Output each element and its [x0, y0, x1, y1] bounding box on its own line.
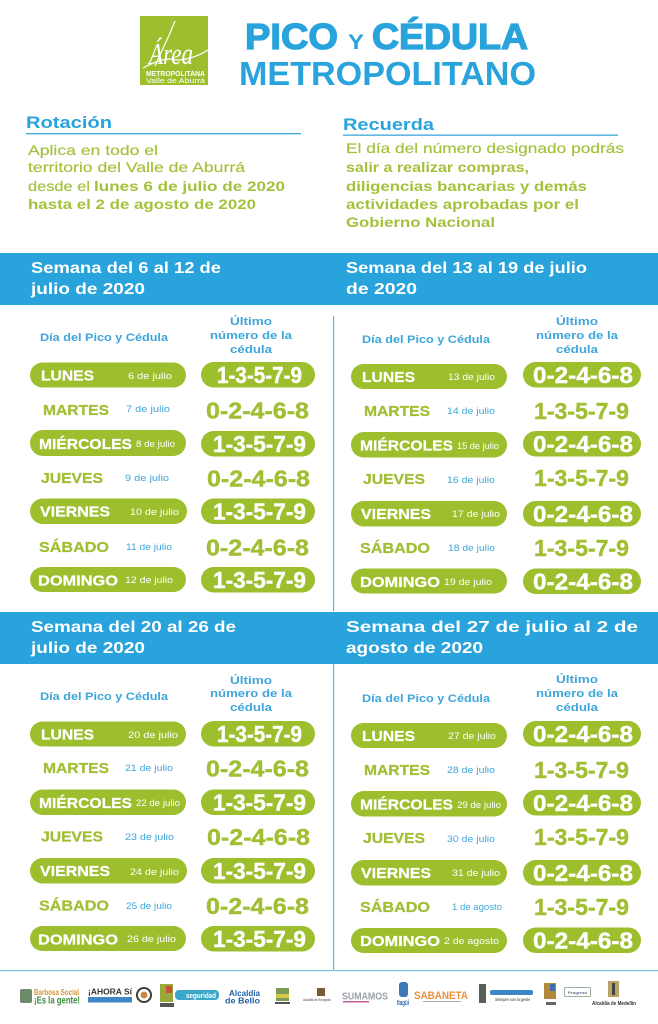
row: miércoles 8: MIÉRCOLES — [39, 436, 132, 453]
logo: Alcaldía de Medellín — [592, 981, 636, 1007]
panel: semana 6 al 12 de julio — [30, 315, 315, 593]
panel: rotación: Aplica en todo el — [28, 142, 158, 158]
row: sábado 11: 11 de julio — [126, 542, 172, 552]
row: viernes 31 — [351, 860, 641, 886]
row: jueves 16 — [363, 465, 629, 491]
row: sábado 18: SÁBADO — [360, 540, 430, 557]
panel: recuerda: actividades aprobadas por el — [346, 196, 579, 212]
row: miércoles 29 — [351, 790, 641, 816]
row: martes 21 — [43, 756, 309, 782]
row: martes 7: 7 de julio — [126, 404, 170, 414]
row: jueves 9: JUEVES — [41, 470, 103, 487]
row: sábado 1 agosto — [360, 894, 629, 920]
row: martes 21: 0-2-4-6-8 — [206, 756, 309, 782]
logo: Alcaldía de Medellín: Alcaldía de Medellín — [592, 1001, 636, 1007]
row: sábado 25: SÁBADO — [39, 898, 109, 914]
band: weeks 3 and 4: Semana del 27 de julio al 2 de — [346, 619, 638, 636]
logo: La Estrella — [479, 984, 533, 1003]
row: jueves 16: 16 de julio — [447, 475, 495, 485]
row: domingo 26: 1-3-5-7-9 — [213, 926, 306, 952]
row: viernes 31: 0-2-4-6-8 — [533, 860, 633, 886]
panel: rotación: lunes 6 de julio de 2020 — [94, 178, 285, 194]
panel: recuerda: salir a realizar compras, — [346, 159, 529, 175]
logo: Envigado: Alcaldía de Envigado — [303, 998, 331, 1002]
row: sábado 25: 25 de julio — [126, 901, 172, 911]
row: martes 14: 14 de julio — [447, 406, 495, 416]
row: jueves 16: 1-3-5-7-9 — [534, 465, 629, 491]
row: lunes 20 — [30, 721, 315, 747]
panel: semana 20 al 26 de julio: número de la — [210, 688, 293, 700]
panel: semana 27 de julio al 2 de agosto: Último — [556, 673, 598, 686]
row: miércoles 15: 15 de julio — [457, 441, 499, 451]
band: weeks 3 and 4: julio de 2020 — [30, 640, 145, 657]
row: lunes 13: 0-2-4-6-8 — [533, 362, 633, 388]
row: miércoles 8: 8 de julio — [136, 439, 175, 449]
row: sábado 11 — [39, 534, 309, 560]
row: lunes 6: 6 de julio — [128, 371, 172, 381]
panel: semana 20 al 26 de julio: Día del Pico y Cédula — [40, 691, 169, 703]
row: martes 28: 28 de julio — [447, 765, 495, 775]
row: jueves 9 — [41, 466, 310, 492]
row: domingo 19: DOMINGO — [360, 574, 440, 591]
row: martes 14: 1-3-5-7-9 — [534, 398, 629, 424]
row: miércoles 22: 1-3-5-7-9 — [213, 790, 306, 816]
row: sábado 18: 1-3-5-7-9 — [534, 535, 629, 561]
panel: semana 13 al 19 de julio — [351, 315, 641, 594]
row: domingo 2 agosto: 2 de agosto — [444, 936, 499, 946]
panel: recuerda — [343, 116, 624, 230]
panel: rotación: hasta el 2 de agosto de 2020 — [28, 196, 256, 212]
row: sábado 1 agosto: SÁBADO — [360, 899, 430, 916]
panel: rotación: desde el — [28, 178, 90, 194]
row: viernes 24: 1-3-5-7-9 — [213, 858, 306, 884]
row: domingo 2 agosto: DOMINGO — [360, 933, 440, 950]
row: domingo 2 agosto: 0-2-4-6-8 — [533, 928, 633, 954]
row: viernes 10: 10 de julio — [130, 507, 179, 517]
panel: semana 27 de julio al 2 de agosto: Día del Pico y Cédula — [362, 693, 491, 705]
row: domingo 12 — [30, 567, 315, 593]
panel: rotación — [26, 114, 301, 212]
logo: Área Metropolitana: Área — [148, 36, 193, 71]
logo: Área Metropolitana: Valle de Aburrá — [146, 78, 205, 85]
row: viernes 17: 0-2-4-6-8 — [533, 501, 633, 527]
row: miércoles 8: 1-3-5-7-9 — [213, 431, 306, 457]
row: jueves 30: JUEVES — [363, 830, 425, 847]
panel: semana 6 al 12 de julio: cédula — [230, 344, 273, 356]
band: weeks 3 and 4: agosto de 2020 — [346, 640, 483, 657]
row: miércoles 29: MIÉRCOLES — [360, 796, 453, 814]
row: jueves 9: 9 de julio — [125, 473, 169, 483]
logo: seguridad — [175, 990, 219, 1000]
logo: Caldas: Progreso — [568, 990, 588, 995]
panel: recuerda: Recuerda — [343, 116, 435, 134]
row: viernes 31: 31 de julio — [452, 868, 500, 878]
panel: semana 6 al 12 de julio: Último — [230, 315, 272, 328]
logo: Ahora Sí: ¡AHORA Sí — [88, 988, 133, 996]
band: weeks 1 and 2: julio de 2020 — [30, 281, 145, 298]
row: viernes 24: VIERNES — [40, 863, 110, 880]
title: METROPOLITANO — [239, 55, 536, 92]
logo: Alcaldía de Bello — [225, 989, 261, 1006]
icon: seal — [137, 988, 151, 1002]
panel: semana 27 de julio al 2 de agosto — [351, 673, 641, 954]
logo: Área Metropolitana — [140, 16, 208, 85]
row: sábado 25: 0-2-4-6-8 — [206, 893, 309, 919]
row: martes 14 — [364, 398, 629, 424]
row: domingo 19: 19 de julio — [444, 577, 492, 587]
row: lunes 13: LUNES — [362, 369, 415, 386]
row: domingo 26 — [30, 926, 315, 952]
row: miércoles 15 — [351, 431, 641, 458]
panel: semana 27 de julio al 2 de agosto: cédula — [556, 702, 599, 714]
panel: semana 13 al 19 de julio: número de la — [536, 330, 619, 342]
row: viernes 24: 24 de julio — [130, 867, 179, 877]
row: miércoles 22 — [30, 790, 315, 816]
row: jueves 30: 30 de julio — [447, 834, 495, 844]
band: weeks 1 and 2: de 2020 — [346, 281, 417, 298]
panel: semana 13 al 19 de julio: Día del Pico y Cédula — [362, 334, 491, 346]
title: Y — [348, 31, 364, 54]
panel: rotación: Rotación — [26, 114, 112, 132]
panel: semana 13 al 19 de julio: Último — [556, 315, 598, 328]
row: lunes 6 — [30, 362, 315, 388]
row: jueves 30: 1-3-5-7-9 — [534, 824, 629, 850]
icon: Bello shield — [275, 988, 290, 1004]
row: lunes 27: 0-2-4-6-8 — [533, 721, 633, 747]
panel: semana 20 al 26 de julio: cédula — [230, 702, 273, 714]
row: viernes 17: VIERNES — [361, 506, 431, 523]
row: lunes 27: 27 de julio — [448, 731, 496, 741]
panel: semana 20 al 26 de julio — [30, 674, 315, 952]
row: miércoles 29: 0-2-4-6-8 — [533, 790, 633, 816]
logo: La Estrella: Siempre con la gente — [495, 997, 530, 1002]
row: domingo 12: DOMINGO — [38, 572, 118, 590]
row: lunes 20: 1-3-5-7-9 — [217, 721, 302, 747]
row: miércoles 15: MIÉRCOLES — [360, 438, 453, 454]
row: domingo 12: 1-3-5-7-9 — [213, 567, 306, 593]
row: viernes 24 — [30, 858, 315, 884]
row: martes 14: MARTES — [364, 403, 430, 420]
row: martes 28: MARTES — [364, 762, 430, 779]
row: sábado 11: 0-2-4-6-8 — [206, 534, 309, 560]
row: miércoles 22: MIÉRCOLES — [39, 795, 132, 812]
row: viernes 17: 17 de julio — [452, 509, 500, 519]
row: jueves 16: JUEVES — [363, 471, 425, 488]
row: sábado 18: 18 de julio — [448, 543, 495, 553]
row: lunes 6: LUNES — [41, 368, 94, 384]
title: CÉDULA — [372, 16, 528, 57]
panel: rotación: territorio del Valle de Aburrá — [28, 159, 245, 175]
row: jueves 9: 0-2-4-6-8 — [207, 466, 310, 492]
title — [239, 16, 536, 92]
panel: recuerda: Gobierno Nacional — [346, 214, 495, 230]
row: jueves 30 — [363, 824, 629, 850]
row: domingo 12: 12 de julio — [125, 575, 173, 585]
row: viernes 10: 1-3-5-7-9 — [213, 498, 306, 524]
panel: semana 13 al 19 de julio: cédula — [556, 344, 599, 356]
logo: Sabaneta: SABANETA — [414, 990, 468, 1002]
footer logos — [20, 981, 636, 1007]
band: weeks 3 and 4: Semana del 20 al 26 de — [31, 619, 236, 636]
title: PICO — [245, 16, 338, 57]
row: lunes 13: 13 de julio — [448, 372, 495, 382]
row: viernes 17 — [351, 501, 641, 527]
row: domingo 19 — [351, 568, 641, 594]
row: lunes 6: 1-3-5-7-9 — [217, 362, 302, 388]
panel: semana 6 al 12 de julio: Día del Pico y Cédula — [40, 332, 169, 344]
logo: Itagüí: Itagüí — [397, 1000, 410, 1007]
row: sábado 1 agosto: 1 de agosto — [452, 902, 502, 912]
row: jueves 23 — [41, 824, 310, 850]
logo: seguridad: seguridad — [186, 993, 216, 1000]
row: miércoles 22: 22 de julio — [136, 798, 180, 808]
row: miércoles 15: 0-2-4-6-8 — [533, 431, 633, 457]
logo: Barbosa Social: ¡Es la gente! — [34, 994, 80, 1006]
row: lunes 20: 20 de julio — [128, 730, 178, 740]
row: martes 21: 21 de julio — [125, 763, 173, 773]
logo: Ahora Sí — [88, 988, 133, 1002]
panel: recuerda: El día del número designado podrás — [346, 140, 624, 156]
row: jueves 23: 0-2-4-6-8 — [207, 824, 310, 850]
panel: semana 27 de julio al 2 de agosto: número de la — [536, 688, 619, 700]
row: miércoles 8 — [30, 430, 315, 457]
logo: Sumamos: SUMAMOS — [342, 992, 388, 1002]
row: sábado 11: SÁBADO — [39, 539, 109, 556]
row: viernes 10: VIERNES — [40, 504, 110, 520]
row: martes 7: MARTES — [43, 402, 109, 419]
logo: Área Metropolitana: METROPOLITANA — [146, 71, 205, 78]
band: weeks 1 and 2: Semana del 13 al 19 de julio — [346, 260, 587, 277]
logo: Alcaldía de Bello: Alcaldía — [229, 989, 261, 998]
row: viernes 31: VIERNES — [361, 865, 431, 882]
band: weeks 1 and 2: Semana del 6 al 12 de — [31, 260, 221, 277]
logo: Itagüí — [397, 982, 410, 1007]
logo: Caldas — [564, 988, 590, 996]
row: lunes 20: LUNES — [41, 726, 94, 744]
row: martes 7: 0-2-4-6-8 — [206, 398, 309, 424]
logo: Barbosa Social: Barbosa Social — [34, 987, 79, 997]
row: domingo 26: 26 de julio — [127, 934, 176, 944]
row: lunes 27: LUNES — [362, 728, 415, 745]
row: martes 28 — [364, 757, 629, 783]
logo: Girardota — [544, 983, 556, 1005]
row: miércoles 29: 29 de julio — [457, 800, 501, 810]
logo: Alcaldía de Bello: de Bello — [225, 996, 260, 1006]
row: sábado 25 — [39, 893, 309, 919]
band: weeks 3 and 4 — [0, 612, 658, 664]
band: weeks 1 and 2 — [0, 253, 658, 305]
row: viernes 10 — [30, 498, 315, 524]
panel: semana 6 al 12 de julio: número de la — [210, 330, 293, 342]
row: sábado 1 agosto: 1-3-5-7-9 — [534, 894, 629, 920]
row: domingo 19: 0-2-4-6-8 — [533, 568, 633, 594]
row: jueves 23: 23 de julio — [125, 832, 174, 842]
row: lunes 13 — [351, 362, 641, 389]
logo: Envigado — [303, 988, 331, 1002]
row: domingo 26: DOMINGO — [38, 932, 118, 948]
row: martes 21: MARTES — [43, 760, 109, 777]
row: martes 7 — [43, 398, 309, 424]
panel: semana 20 al 26 de julio: Último — [230, 674, 272, 687]
row: jueves 23: JUEVES — [41, 828, 103, 846]
logo: Barbosa Social — [20, 987, 80, 1006]
icon: shield — [160, 984, 174, 1007]
row: martes 28: 1-3-5-7-9 — [534, 757, 629, 783]
row: domingo 2 agosto — [351, 928, 641, 954]
panel: recuerda: diligencias bancarias y demás — [346, 178, 587, 194]
row: lunes 27 — [351, 721, 641, 748]
row: sábado 18 — [360, 535, 629, 561]
